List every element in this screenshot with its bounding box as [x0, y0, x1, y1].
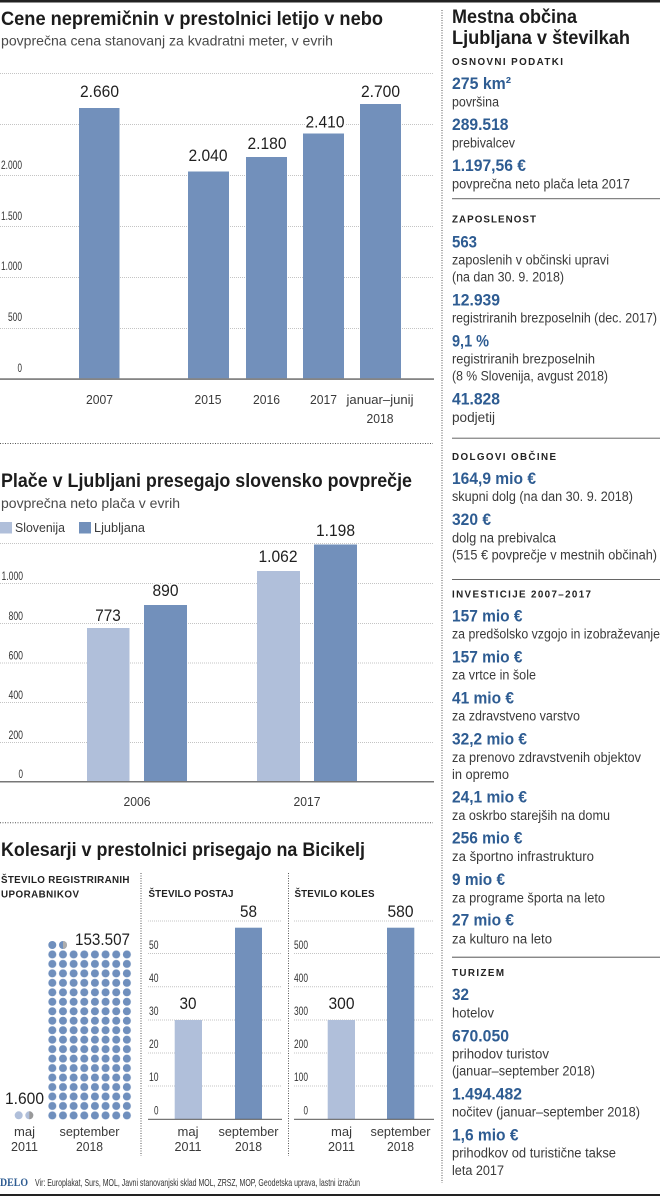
registered users dot chart: 2011	[11, 1139, 38, 1154]
x axis labels: 2018	[366, 411, 394, 426]
stations bar chart: 0	[154, 1106, 158, 1118]
section: employment	[452, 215, 657, 425]
bikes bar chart: september	[370, 1124, 431, 1139]
bars with values: 2.700	[361, 83, 400, 101]
bikes bar chart	[294, 888, 434, 1154]
section: basic data: površina	[452, 95, 499, 110]
section: municipal debt: DOLGOVI OBČINE	[452, 451, 556, 463]
section: employment: podjetij	[452, 410, 495, 425]
section: investments: za oskrbo starejših na domu	[452, 808, 610, 823]
y axis labels: 500	[8, 312, 22, 324]
bikes bar chart: 2011	[328, 1139, 355, 1154]
section: tourism: leta 2017	[452, 1163, 504, 1178]
x axis labels: 2006	[124, 794, 150, 809]
panel: wages chart	[0, 471, 434, 809]
section: basic data: prebivalcev	[452, 136, 515, 151]
x axis labels: 2017	[294, 794, 320, 809]
section: investments: 27 mio €	[452, 912, 514, 930]
section: tourism: hotelov	[452, 1006, 494, 1021]
x axis labels: januar–junij	[345, 392, 414, 407]
x axis labels: 2016	[253, 392, 280, 407]
stations bar chart: 30	[149, 1006, 158, 1018]
heading: wages: Plače v Ljubljani presegajo slovensko povprečje	[1, 471, 412, 492]
section: basic data	[452, 57, 630, 192]
stations bar chart: 2011	[174, 1139, 202, 1154]
section: municipal debt: dolg na prebivalca	[452, 530, 556, 545]
bikes bar chart: 300	[294, 1006, 308, 1018]
bikes bar chart: ŠTEVILO KOLES	[294, 888, 375, 900]
dots: maj 2011	[15, 1111, 33, 1119]
footer: source line: DELO	[0, 1177, 28, 1189]
bikes bar chart: maj	[331, 1124, 352, 1139]
legend	[0, 520, 146, 535]
bars with values: 1.198	[316, 522, 355, 540]
x axis labels: 2007	[86, 392, 113, 407]
bikes bar chart: 580	[388, 903, 414, 921]
bars with values: 2.040	[188, 147, 228, 165]
bikes bar chart: 2018	[387, 1139, 414, 1154]
section: tourism: 670.050	[452, 1027, 509, 1045]
subheading: property prices: povprečna cena stanovanj za kvadratni meter, v evrih	[1, 32, 333, 48]
section: tourism: prihodov turistov	[452, 1046, 549, 1061]
y axis labels: 2.000	[1, 160, 22, 172]
section: tourism: 32	[452, 986, 469, 1004]
section: investments: in opremo	[452, 767, 509, 782]
registered users dot chart: 2018	[76, 1139, 103, 1154]
stations bar chart: 10	[149, 1072, 158, 1084]
bars with values: 2.180	[248, 135, 286, 153]
dots: september 2018	[47, 941, 132, 1120]
registered users dot chart: maj	[14, 1124, 35, 1139]
bars with values: 2.410	[306, 114, 344, 132]
legend: Ljubljana	[94, 520, 146, 535]
section: tourism: 1.494.482	[452, 1085, 522, 1103]
stations bar chart: 50	[149, 940, 158, 952]
y axis labels: 1.000	[2, 571, 23, 583]
section: investments: za kulturo na leto	[452, 931, 552, 946]
bikes bar chart: 200	[294, 1039, 308, 1051]
section: basic data: povprečna neto plača leta 2017	[452, 177, 630, 192]
section: investments: za programe športa na leto	[452, 890, 605, 905]
y axis labels	[1, 160, 22, 375]
section: investments: INVESTICIJE 2007–2017	[452, 590, 592, 601]
panel: cyclists	[1, 840, 434, 1154]
y axis labels: 800	[8, 611, 23, 623]
section: investments: 32,2 mio €	[452, 731, 527, 749]
section: municipal debt: 320 €	[452, 511, 491, 529]
footer: source line: Vir: Europlakat, Surs, MOL, Javni stanovanjski sklad MOL, ZRSZ, MOP, Geodetska uprava, lastni izračun	[35, 1177, 360, 1189]
section: basic data: OSNOVNI PODATKI	[452, 57, 563, 68]
bikes bar chart: 400	[294, 973, 308, 985]
stations bar chart: 30	[180, 995, 196, 1013]
section: employment: ZAPOSLENOST	[452, 215, 536, 226]
section: tourism: TURIZEM	[452, 968, 504, 979]
heading: Ljubljana in numbers: Mestna občina	[452, 7, 577, 28]
bars with values: 773	[95, 607, 121, 625]
bars with values: 890	[152, 582, 178, 600]
section: employment: zaposlenih v občinski upravi	[452, 252, 609, 267]
bars with values: 2.660	[80, 83, 119, 101]
section: basic data: 275 km²	[452, 75, 511, 93]
heading: cyclists: Kolesarji v prestolnici prisegajo na Bicikelj	[1, 840, 365, 861]
bars with values: 1.062	[258, 548, 298, 566]
registered users dot chart: ŠTEVILO REGISTRIRANIH	[1, 874, 130, 886]
y axis labels: 600	[8, 650, 23, 662]
section: investments	[452, 590, 660, 946]
registered users dot chart: UPORABNIKOV	[1, 890, 79, 900]
bars with values	[79, 83, 401, 379]
y axis labels: 0	[18, 769, 23, 781]
stations bar chart: 20	[149, 1039, 158, 1051]
stations bar chart: september	[218, 1124, 279, 1139]
heading: Ljubljana in numbers: Ljubljana v številkah	[452, 28, 630, 49]
x axis labels	[86, 392, 414, 426]
stations bar chart: 2018	[235, 1139, 262, 1154]
section: basic data: 289.518	[452, 116, 508, 134]
section: investments: 157 mio €	[452, 607, 522, 625]
x axis labels	[124, 794, 320, 809]
bikes bar chart: 300	[328, 995, 354, 1013]
panel: property prices chart	[0, 9, 434, 426]
subheading: wages: povprečna neto plača v evrih	[1, 495, 180, 511]
section: employment: 9,1 %	[452, 332, 489, 350]
section: employment: 41.828	[452, 391, 500, 409]
registered users dot chart: 153.507	[75, 931, 130, 949]
stations bar chart: ŠTEVILO POSTAJ	[148, 888, 234, 900]
section: employment: (8 % Slovenija, avgust 2018)	[452, 369, 608, 384]
section: municipal debt: 164,9 mio €	[452, 470, 536, 488]
heading: property prices: Cene nepremičnin v prestolnici letijo v nebo	[1, 9, 383, 30]
heading: Ljubljana in numbers	[452, 7, 630, 49]
section: employment: (na dan 30. 9. 2018)	[452, 269, 564, 284]
y axis labels: 400	[8, 690, 23, 702]
section: municipal debt: skupni dolg (na dan 30. 9. 2018)	[452, 489, 633, 504]
section: basic data: 1.197,56 €	[452, 157, 526, 175]
registered users dot chart: september	[60, 1124, 120, 1139]
stations bar chart	[148, 888, 282, 1154]
section: tourism: (januar–september 2018)	[452, 1064, 595, 1079]
section: investments: za vrtce in šole	[452, 668, 536, 683]
section: tourism: prihodkov od turistične takse	[452, 1146, 616, 1161]
panel: Ljubljana in numbers	[452, 7, 660, 1178]
y axis labels: 1.500	[1, 211, 22, 223]
registered users dot chart: 1.600	[5, 1090, 44, 1108]
section: investments: za športno infrastrukturo	[452, 849, 594, 864]
section: investments: 9 mio €	[452, 871, 505, 889]
stations bar chart: 58	[240, 903, 257, 921]
section: investments: 24,1 mio €	[452, 789, 527, 807]
stations bar chart: 40	[149, 973, 158, 985]
legend: Slovenija	[15, 520, 66, 535]
section: tourism: nočitev (januar–september 2018)	[452, 1105, 640, 1120]
section: investments: 157 mio €	[452, 648, 522, 666]
section: employment: registriranih brezposelnih	[452, 351, 595, 366]
x axis labels: 2017	[310, 392, 337, 407]
section: employment: 12.939	[452, 292, 500, 310]
bikes bar chart: 0	[304, 1106, 308, 1118]
bikes bar chart: 500	[294, 940, 308, 952]
section: investments: za prenovo zdravstvenih objektov	[452, 750, 641, 765]
section: tourism: 1,6 mio €	[452, 1127, 518, 1145]
section: employment: 563	[452, 233, 477, 251]
section: municipal debt	[452, 451, 657, 562]
registered users dot chart	[1, 874, 132, 1154]
y axis labels: 1.000	[1, 261, 22, 273]
stations bar chart: maj	[178, 1124, 199, 1139]
x axis labels: 2015	[194, 392, 222, 407]
section: tourism	[452, 968, 640, 1178]
footer: source line	[0, 1177, 360, 1189]
y axis labels: 0	[18, 363, 22, 375]
section: investments: 41 mio €	[452, 689, 514, 707]
section: investments: za zdravstveno varstvo	[452, 709, 580, 724]
section: investments: 256 mio €	[452, 830, 522, 848]
bikes bar chart: 100	[294, 1072, 308, 1084]
y axis labels: 200	[8, 730, 23, 742]
bars with values	[87, 522, 357, 782]
y axis labels	[2, 571, 23, 781]
